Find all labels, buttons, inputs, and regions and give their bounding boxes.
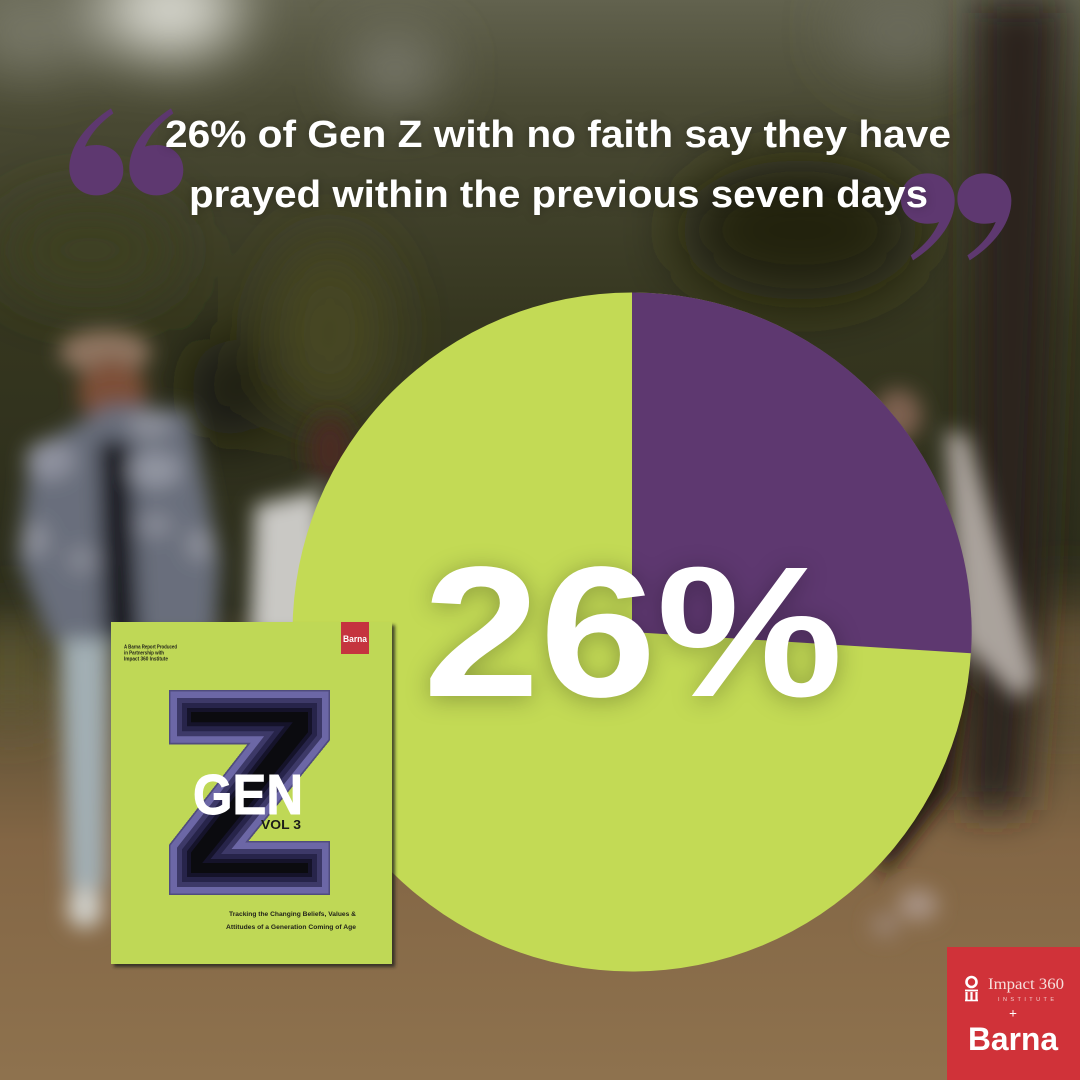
cover small credit: A Barna Report Produced [124,644,177,650]
cover small credit [124,644,177,662]
blurred people [18,330,1038,937]
cover subtitle: Tracking the Changing Beliefs, Values & [229,911,356,918]
Barna mini badge [341,622,369,654]
cover subtitle: Attitudes of a Generation Coming of Age [226,924,356,931]
Impact 360 wordmark: Impact 360 [988,976,1064,993]
pie slice: remaining 74 percent [292,292,972,972]
cover shadow [114,625,395,967]
headline quote: prayed within the previous seven days [189,174,928,216]
institute wordmark: INSTITUTE [998,997,1054,1003]
icon: Impact 360 pillars [965,977,978,1000]
cover subtitle [226,911,356,931]
Barna mini badge: Barna [343,634,368,645]
layered letter Z [169,690,330,895]
report cover [111,622,398,970]
big percentage: 26% [423,529,843,736]
Barna wordmark: Barna [968,1021,1058,1057]
tree trunk [960,0,1062,810]
cover small credit: Impact 360 Institute [124,656,168,662]
GEN title: GEN [193,763,303,827]
volume label: VOL 3 [261,817,301,832]
plus sign: + [1009,1007,1017,1022]
headline quote: 26% of Gen Z with no faith say they have [165,114,951,156]
cover page [111,622,392,964]
cover small credit: in Partnership with [124,650,164,656]
pie slice: 26 percent [632,292,972,653]
